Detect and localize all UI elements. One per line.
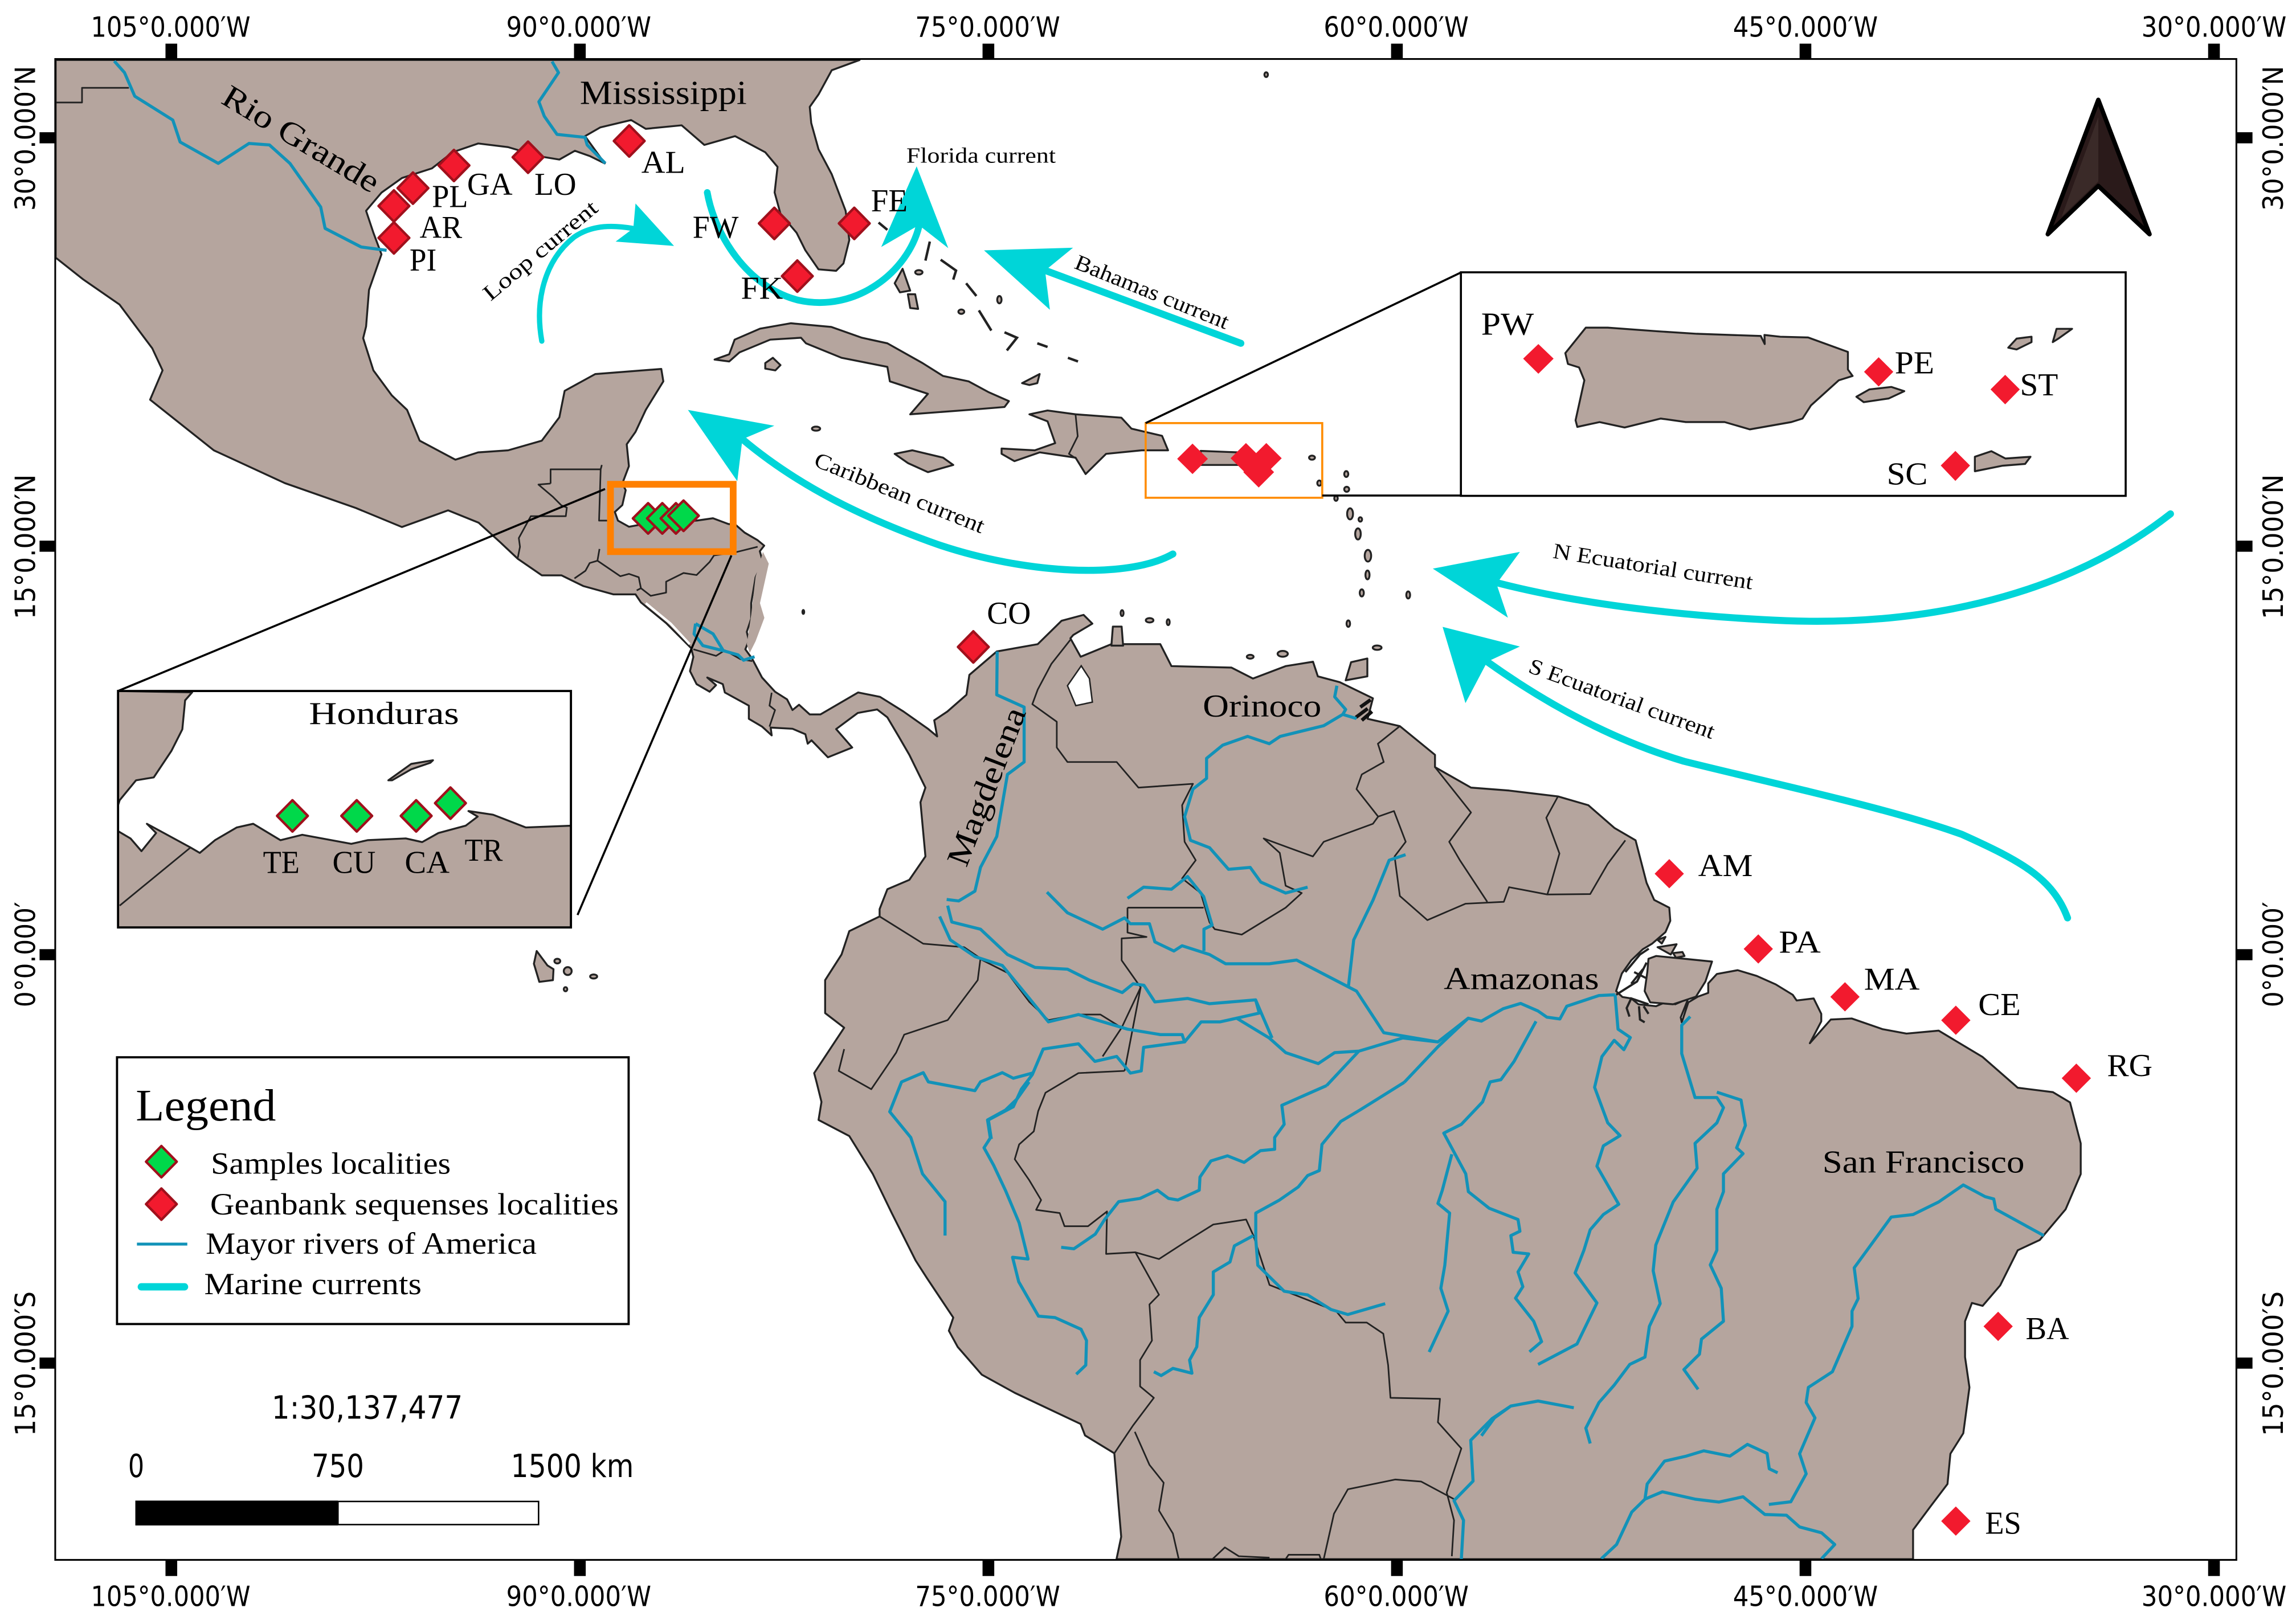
labels: current names: N Ecuatorial current — [1551, 539, 1755, 595]
labels: locality codes: LO — [534, 167, 577, 202]
legend — [117, 1057, 628, 1324]
locator box: Puerto Rico — [1146, 423, 1322, 498]
current: Caribbean current — [688, 410, 1173, 570]
current: North Equatorial current — [1433, 514, 2171, 621]
labels: locality codes: FE — [871, 183, 908, 219]
labels: river names — [216, 73, 2024, 1180]
axis labels: top longitudes: 75°0.000′W — [915, 11, 1060, 43]
markers: Puerto Rico on main map — [1177, 443, 1282, 488]
rivers — [115, 61, 2044, 1559]
axis labels: left latitudes — [10, 66, 42, 1436]
scale bar: 750 — [312, 1448, 364, 1485]
labels: river names: Orinoco — [1203, 689, 1321, 724]
axis labels: bottom longitudes: 90°0.000′W — [506, 1580, 651, 1613]
national borders — [56, 88, 1625, 1559]
labels: locality codes: FK — [741, 271, 783, 306]
axis labels: top longitudes: 105°0.000′W — [91, 11, 251, 43]
legend: Geanbank sequenses localities — [210, 1187, 619, 1221]
labels: locality codes: RG — [2107, 1048, 2152, 1083]
inset: Honduras — [118, 691, 571, 927]
labels: locality codes: MA — [1864, 962, 1920, 997]
labels: locality codes: PI — [410, 243, 436, 278]
labels: current names: S Ecuatorial current — [1526, 654, 1718, 744]
labels: current names: Loop current — [479, 196, 603, 305]
scale ratio: 1:30,137,477 — [272, 1389, 463, 1426]
markers: Honduras samples on main map — [633, 501, 698, 534]
inset: Honduras: TR — [465, 833, 503, 868]
labels: locality codes: GA — [467, 167, 513, 202]
axis labels: bottom longitudes — [91, 1580, 2286, 1613]
labels: locality codes: PA — [1779, 925, 1821, 960]
current: Bahamas current — [984, 248, 1241, 343]
labels: locality codes: PL — [432, 179, 468, 215]
legend: Marine currents — [204, 1267, 422, 1301]
labels: current names: Florida current — [906, 144, 1056, 167]
axis labels: top longitudes: 60°0.000′W — [1323, 11, 1469, 43]
labels: locality codes — [410, 145, 2152, 1541]
axis labels: bottom longitudes: 105°0.000′W — [91, 1580, 251, 1613]
labels: current names: Bahamas current — [1072, 251, 1232, 334]
labels: locality codes: CO — [987, 596, 1031, 631]
islands: Caribbean, Bahamas and Galapagos — [534, 72, 1410, 991]
labels: locality codes: CE — [1978, 987, 2021, 1022]
current: Florida current — [707, 166, 948, 302]
inset: Puerto Rico: ST — [2020, 367, 2058, 403]
labels: locality codes: AL — [642, 145, 685, 180]
axis labels: right latitudes — [2257, 66, 2290, 1436]
labels: current names: Caribbean current — [811, 448, 988, 538]
labels: river names: Mississippi — [580, 73, 747, 111]
legend: Mayor rivers of America — [206, 1226, 537, 1261]
inset: Puerto Rico: PW — [1481, 306, 1534, 342]
axis labels: top longitudes: 90°0.000′W — [506, 11, 651, 43]
legend: Samples localities — [211, 1146, 451, 1180]
inset: Honduras: Honduras — [309, 696, 459, 731]
axis labels: top longitudes: 45°0.000′W — [1733, 11, 1878, 43]
scale bar — [128, 1448, 634, 1525]
axis labels: right latitudes: 0°0.000′ — [2257, 902, 2290, 1007]
labels: locality codes: ES — [1985, 1506, 2021, 1541]
inset: Puerto Rico — [1461, 272, 2126, 496]
locator box: Honduras — [611, 484, 733, 551]
axis labels: left latitudes: 15°0.000′S — [10, 1291, 42, 1436]
current: South Equatorial current — [1443, 627, 2068, 918]
labels: river names: San Francisco — [1823, 1145, 2024, 1180]
axis labels: bottom longitudes: 45°0.000′W — [1733, 1580, 1878, 1613]
axis labels: bottom longitudes: 75°0.000′W — [915, 1580, 1060, 1613]
inset: Honduras: CA — [405, 845, 450, 880]
markers: GenBank localities, Gulf of Mexico and Caribbean — [378, 125, 988, 662]
labels: river names: Rio Grande — [216, 79, 386, 200]
inset: Puerto Rico: PE — [1895, 345, 1934, 381]
markers: Atlantic Brazil localities — [1654, 859, 2091, 1536]
scale bar: 1500 km — [510, 1448, 634, 1485]
inset: Honduras: CU — [332, 845, 375, 880]
labels: locality codes: AR — [420, 210, 462, 246]
inset: Puerto Rico: SC — [1887, 457, 1928, 492]
inset: Honduras: TE — [263, 845, 300, 880]
scale bar: 0 — [128, 1448, 144, 1485]
labels: locality codes: BA — [2026, 1311, 2069, 1347]
labels: current names — [479, 144, 1755, 744]
axis labels: bottom longitudes: 60°0.000′W — [1323, 1580, 1469, 1613]
labels: locality codes: FW — [693, 210, 739, 246]
axis labels: left latitudes: 15°0.000′N — [10, 474, 42, 619]
current: Loop current — [540, 203, 674, 341]
labels: river names: Amazonas — [1444, 962, 1599, 997]
labels: river names: Magdelena — [941, 702, 1033, 871]
axis labels: right latitudes: 15°0.000′N — [2257, 474, 2290, 619]
axis labels: top longitudes — [91, 11, 2286, 43]
icon: north arrow — [2048, 100, 2150, 234]
labels: locality codes: AM — [1698, 848, 1752, 883]
axis labels: right latitudes: 30°0.000′N — [2257, 66, 2290, 211]
axis labels: right latitudes: 15°0.000′S — [2257, 1291, 2290, 1436]
marine currents — [540, 166, 2171, 918]
axis labels: left latitudes: 0°0.000′ — [10, 902, 42, 1007]
axis labels: left latitudes: 30°0.000′N — [10, 66, 42, 211]
zoom lines to insets — [118, 272, 1461, 915]
legend: Legend — [136, 1081, 276, 1131]
